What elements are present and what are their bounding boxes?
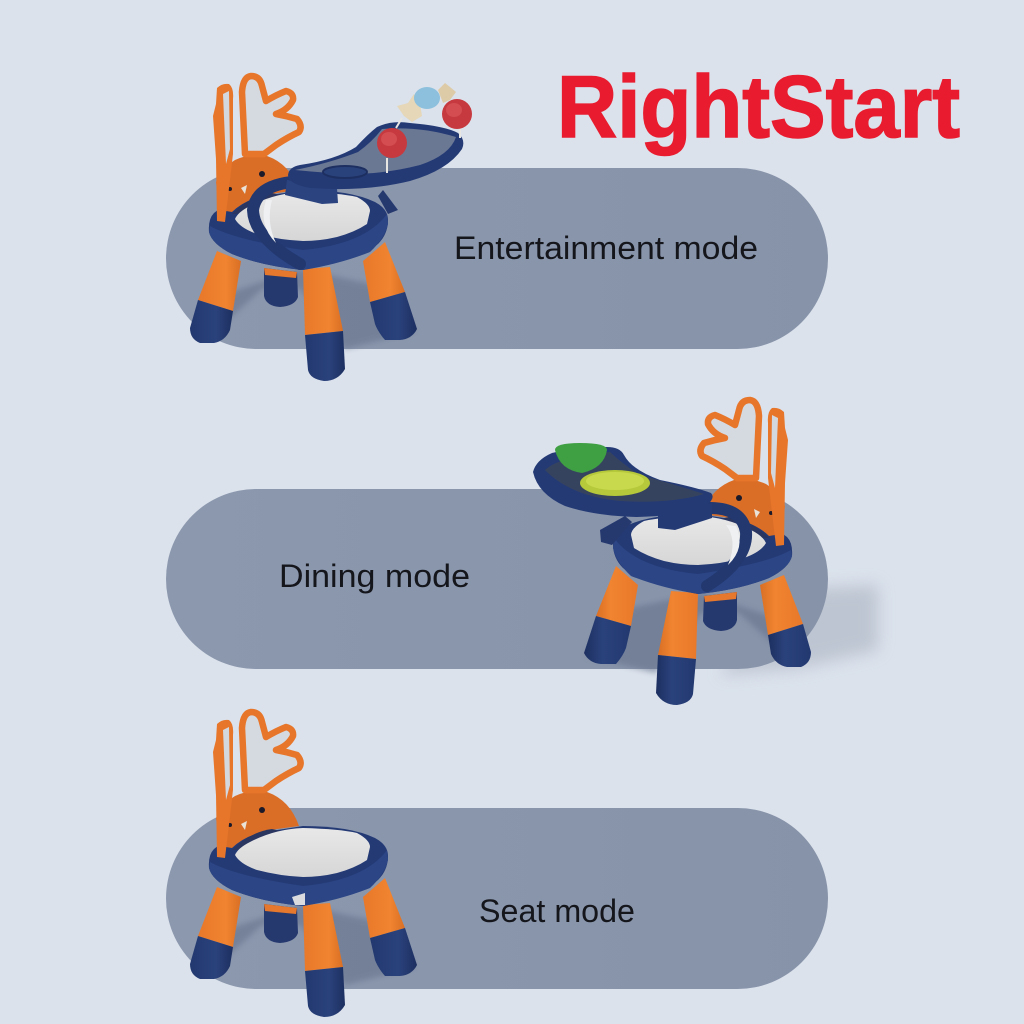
tray buckle	[658, 503, 712, 530]
panel: entertainment mode band	[166, 168, 828, 349]
cup ring	[323, 166, 367, 178]
tray arm	[253, 182, 300, 264]
logo: RightStart: RightStart	[557, 57, 960, 156]
heading: Entertainment mode: Entertainment mode	[454, 230, 758, 266]
white crescent	[726, 525, 740, 565]
panel: dining mode band	[166, 489, 878, 675]
icon: chair in seat mode	[190, 712, 417, 1017]
tray	[288, 122, 463, 189]
plate center	[586, 472, 644, 490]
icon: chair in dining mode	[533, 400, 811, 705]
white crescent	[264, 200, 276, 243]
tray surface	[545, 452, 704, 502]
heading: Seat mode: Seat mode	[479, 893, 635, 929]
tray buckle	[285, 180, 338, 204]
green bowl	[555, 443, 607, 473]
red ball right	[442, 99, 472, 129]
tray	[533, 447, 713, 517]
seat latch	[292, 893, 305, 905]
tray arm	[707, 508, 746, 586]
tray hinge	[600, 516, 632, 545]
icon: chair in entertainment mode	[190, 76, 472, 381]
yellow plate	[580, 470, 650, 496]
red ball left	[377, 128, 407, 158]
hinge	[378, 190, 398, 214]
toy bead	[397, 94, 422, 122]
toy sticks	[387, 118, 460, 173]
heading: Dining mode: Dining mode	[279, 558, 470, 594]
blue bead	[414, 87, 440, 109]
star bead	[438, 83, 456, 103]
panel: seat mode band	[166, 808, 828, 989]
tray surface	[295, 128, 456, 174]
